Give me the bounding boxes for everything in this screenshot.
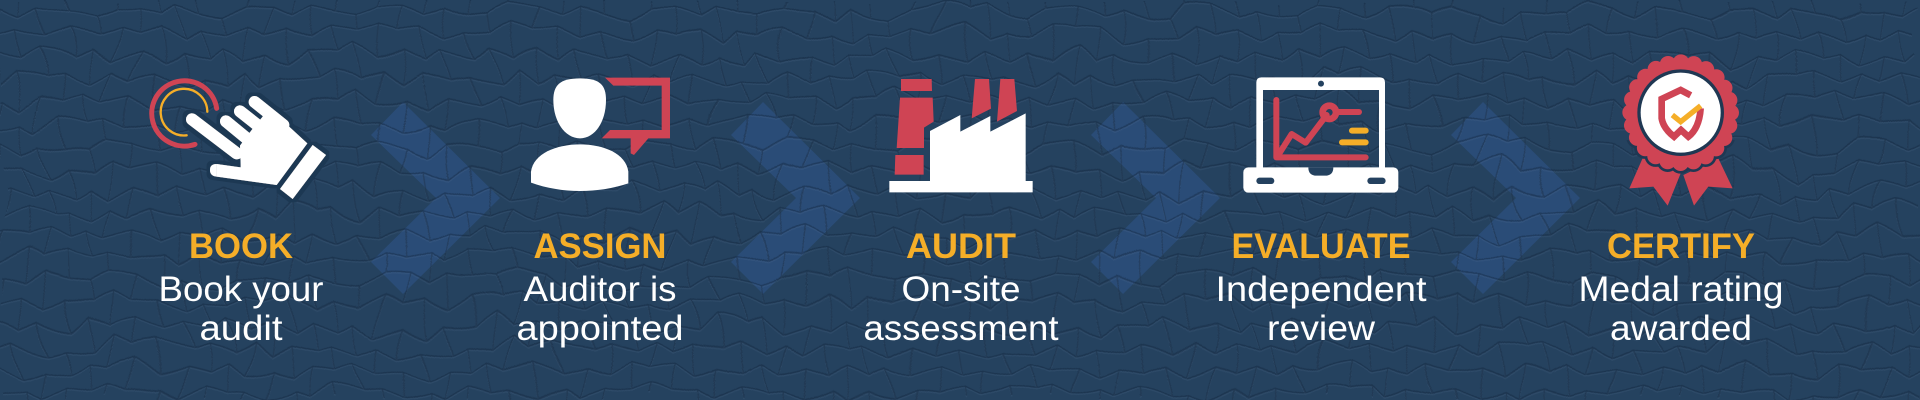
arrow: evaluate to certify [1451,102,1580,294]
step: assign text: Auditor is [524,270,676,309]
step: evaluate text [1216,227,1427,348]
step: assign text [516,227,684,348]
icon: medal rosette [1629,61,1733,206]
step: audit text: AUDIT [906,227,1016,266]
step: certify text: awarded [1610,309,1752,348]
step: audit text: On-site [902,270,1020,309]
icon: hand pressing button [152,81,326,199]
arrow: audit to evaluate [1091,102,1220,294]
icon: laptop with chart [1243,77,1398,193]
step: evaluate text: review [1267,309,1376,348]
step: book text: Book your [158,270,324,309]
icon: factory [889,79,1033,192]
arrow: book to assign [371,102,500,294]
step: assign text: appointed [516,309,684,348]
step: book text: audit [200,309,283,348]
step: evaluate text: Independent [1216,270,1427,309]
step: certify text [1578,227,1784,348]
step: book text: BOOK [189,227,293,266]
step: certify text: Medal rating [1578,270,1784,309]
arrow: assign to audit [731,102,860,294]
step: audit text [864,227,1059,348]
chevron arrows between steps [371,102,1580,294]
step: evaluate text: EVALUATE [1232,227,1410,266]
step: assign text: ASSIGN [534,227,666,266]
icon: auditor with speech bubble [531,78,670,191]
step: audit text: assessment [864,309,1059,348]
step: book text [158,227,324,348]
step: certify text: CERTIFY [1607,227,1755,266]
